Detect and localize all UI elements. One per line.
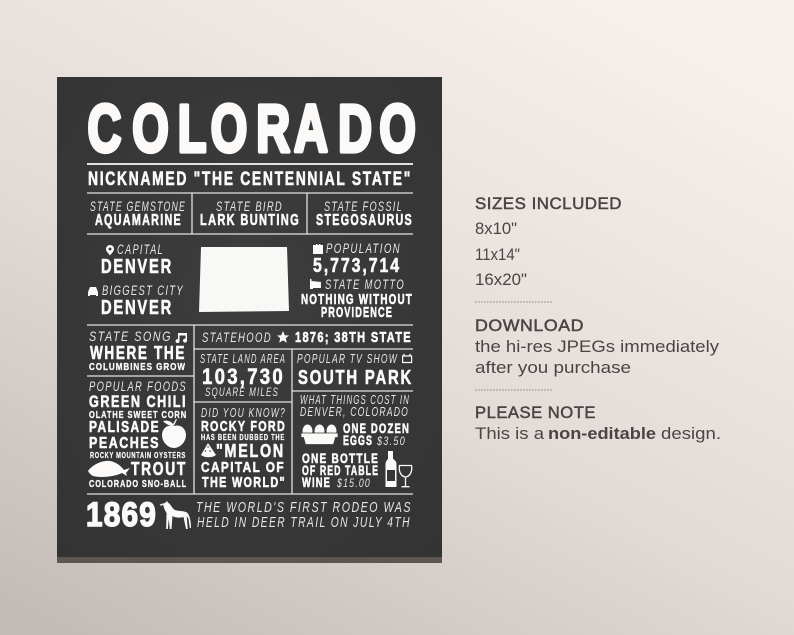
panel: sizes included <box>475 194 622 289</box>
panel: what things cost: $15.00 <box>336 478 371 490</box>
panel: did you know: CAPITAL OF <box>201 459 285 476</box>
panel: capital <box>101 242 173 278</box>
panel: state bird <box>200 198 300 229</box>
panel: population <box>313 241 401 277</box>
icon: music note <box>176 333 187 343</box>
panel: did you know: DID YOU KNOW? <box>201 406 286 420</box>
panel: popular TV show: SOUTH PARK <box>298 367 413 389</box>
panel: state motto: STATE MOTTO <box>325 277 405 292</box>
panel: did you know: HAS BEEN DUBBED THE <box>201 433 285 442</box>
icon: egg carton <box>301 424 338 444</box>
panel: what things cost: ONE BOTTLE <box>302 450 379 466</box>
panel: popular foods: GREEN CHILI <box>89 393 187 411</box>
panel: what things cost: WINE <box>302 474 331 490</box>
panel: biggest city: DENVER <box>101 297 173 319</box>
panel: state song: WHERE THE <box>90 343 186 363</box>
panel: state bird: STATE BIRD <box>216 198 283 214</box>
icon: fish <box>88 461 130 477</box>
panel: please note: non-editable <box>548 425 656 443</box>
title: COLORADO <box>87 92 416 167</box>
icon: television <box>403 354 412 362</box>
panel: download: the hi-res JPEGs immediately <box>475 338 720 356</box>
panel: download: after you purchase <box>475 359 631 377</box>
panel: land area: STATE LAND AREA <box>200 352 286 366</box>
panel: download <box>475 316 720 377</box>
panel: did you know: ROCKY FORD <box>201 418 286 435</box>
panel: statehood <box>202 329 412 346</box>
panel: download: DOWNLOAD <box>475 316 584 335</box>
rodeo fact: HELD IN DEER TRAIL ON JULY 4TH <box>197 515 411 531</box>
panel: popular TV show: POPULAR TV SHOW <box>297 352 398 366</box>
panel: what things cost: WHAT THINGS COST IN <box>300 393 410 407</box>
year: 1869 <box>86 496 157 534</box>
panel: state fossil: STATE FOSSIL <box>324 198 403 214</box>
icon: horse <box>160 501 191 529</box>
panel: sizes included: 16x20" <box>475 271 527 289</box>
icon: peach <box>162 419 186 448</box>
panel: what things cost: EGGS <box>343 432 373 448</box>
icon: map pin <box>106 245 114 256</box>
panel: state song <box>89 328 187 373</box>
nickname: NICKNAMED "THE CENTENNIAL STATE" <box>88 169 412 190</box>
icon: wine bottle <box>386 451 396 487</box>
panel: popular foods: POPULAR FOODS <box>89 379 187 394</box>
panel: state bird: LARK BUNTING <box>200 212 300 229</box>
panel: sizes included: 11x14" <box>475 246 520 264</box>
panel: state motto: NOTHING WITHOUT <box>301 292 413 308</box>
panel: please note: PLEASE NOTE <box>475 403 596 422</box>
icon: watermelon slice <box>201 443 216 457</box>
icon: car <box>88 287 98 296</box>
icon: wine glass <box>399 466 412 487</box>
panel: what things cost: ONE DOZEN <box>343 420 410 436</box>
panel: popular foods: TROUT <box>131 459 187 479</box>
panel: popular TV show <box>297 352 413 389</box>
icon: people <box>313 244 323 254</box>
panel: capital: CAPITAL <box>117 242 164 257</box>
poster shadow <box>57 550 442 563</box>
section dividers <box>87 164 413 494</box>
panel: did you know: "MELON <box>216 440 285 461</box>
panel: biggest city: BIGGEST CITY <box>102 283 184 298</box>
panel: state motto: PROVIDENCE <box>321 305 393 321</box>
panel: population: POPULATION <box>326 241 401 256</box>
panel: popular foods <box>88 379 187 490</box>
panel: land area <box>200 352 286 399</box>
panel: please note: design. <box>661 425 721 443</box>
panel: state gemstone: STATE GEMSTONE <box>90 198 186 214</box>
rodeo fact <box>196 500 412 531</box>
panel: what things cost: DENVER, COLORADO <box>300 405 409 419</box>
panel: land area: 103,730 <box>202 364 285 389</box>
panel: state gemstone: AQUAMARINE <box>95 212 182 229</box>
panel: popular foods: OLATHE SWEET CORN <box>89 409 187 421</box>
panel: state gemstone <box>90 198 186 229</box>
panel: state fossil <box>316 198 413 229</box>
panel: state fossil: STEGOSAURUS <box>316 212 413 229</box>
chalkboard poster <box>57 77 442 557</box>
panel: what things cost: $3.50 <box>376 436 406 448</box>
panel: popular foods: COLORADO SNO-BALL <box>89 478 187 490</box>
panel: statehood: STATEHOOD <box>202 329 272 345</box>
panel: statehood: 1876; 38TH STATE <box>295 330 412 346</box>
panel: please note: This is a <box>475 425 545 443</box>
panel: state song: COLUMBINES GROW <box>89 361 186 373</box>
panel: sizes included: 8x10" <box>475 220 517 238</box>
panel: land area: SQUARE MILES <box>205 385 279 399</box>
panel: what things cost: OF RED TABLE <box>302 462 379 478</box>
panel: popular foods: PALISADE <box>89 419 160 436</box>
panel: population: 5,773,714 <box>313 254 401 277</box>
panel: popular foods: PEACHES <box>89 435 160 452</box>
icon: flag <box>310 279 321 289</box>
icon: star <box>277 331 289 343</box>
panel: capital: DENVER <box>101 256 173 278</box>
panel: sizes included: SIZES INCLUDED <box>475 194 622 213</box>
panel: what things cost <box>300 393 412 490</box>
rodeo fact: THE WORLD'S FIRST RODEO WAS <box>196 500 412 516</box>
panel: please note <box>475 403 721 443</box>
panel: popular foods: ROCKY MOUNTAIN OYSTERS <box>90 451 186 460</box>
panel: state motto <box>301 277 413 321</box>
panel: did you know: THE WORLD" <box>202 474 286 491</box>
state map of Colorado <box>199 247 289 312</box>
panel: biggest city <box>88 283 184 319</box>
panel: did you know <box>201 406 286 491</box>
panel: state song: STATE SONG <box>89 328 172 344</box>
